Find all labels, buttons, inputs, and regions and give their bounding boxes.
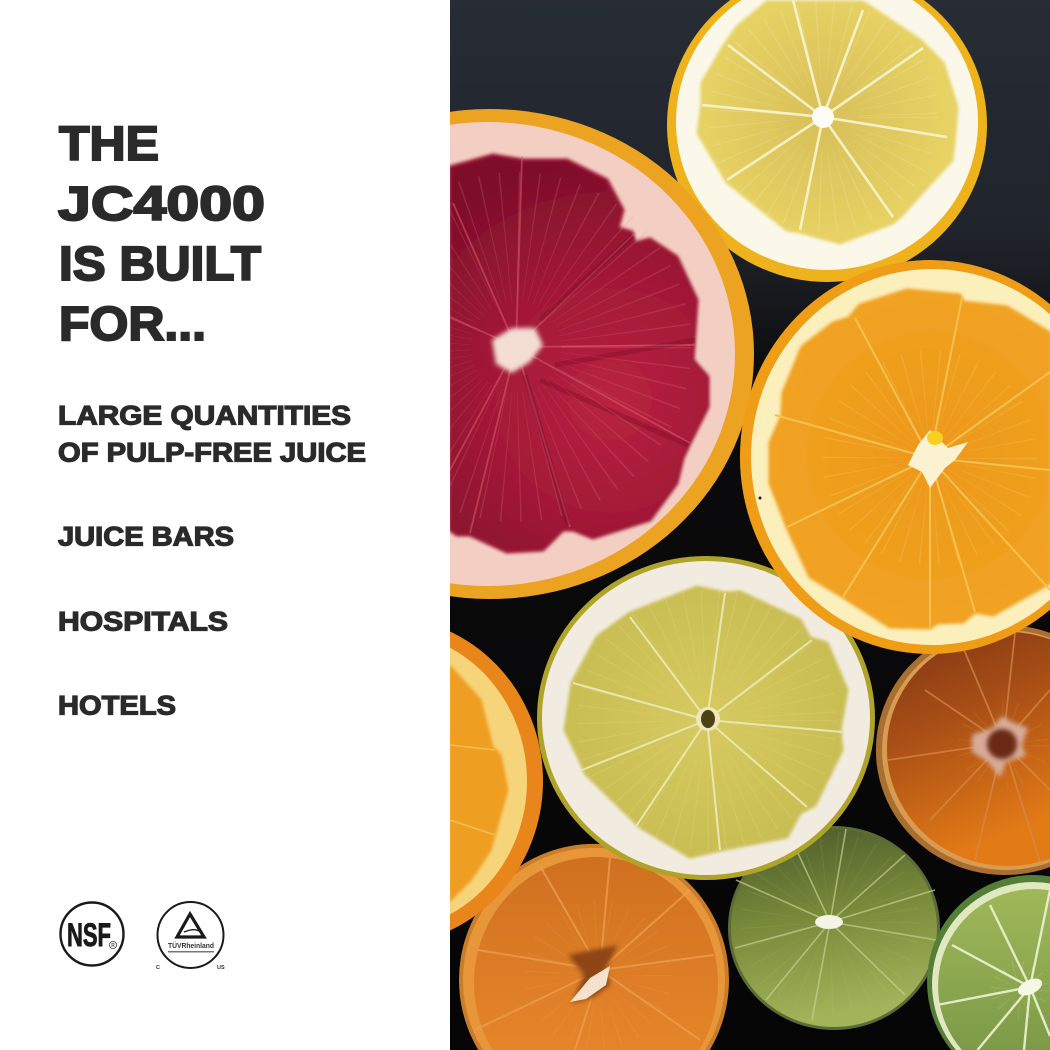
orange slice, large right — [740, 260, 1050, 654]
use case: hotels: HOTELS — [58, 690, 176, 720]
orange slice, left edge — [450, 632, 543, 930]
use case: large quantities of pulp-free juice: OF PULP-FREE JUICE — [58, 438, 366, 468]
grapefruit slice — [450, 109, 754, 599]
lime slice, centre bottom — [728, 826, 940, 1030]
icon: NSF certification: NSF — [67, 917, 111, 953]
icon: NSF certification — [60, 902, 124, 966]
title: IS BUILT — [59, 238, 261, 291]
use case: hospitals: HOSPITALS — [58, 606, 228, 636]
lemon slice, centre — [537, 556, 875, 880]
icon: NSF certification: R — [111, 943, 115, 949]
title: JC4000 — [58, 178, 265, 231]
dark slate backdrop — [450, 0, 1050, 1050]
use case: juice bars: JUICE BARS — [58, 522, 234, 552]
title: FOR... — [59, 298, 206, 351]
icon: TUV Rheinland certification — [156, 902, 225, 971]
dark orange slice, right — [876, 625, 1050, 875]
use case: large quantities of pulp-free juice — [58, 400, 366, 468]
icon: TUV Rheinland certification: US — [217, 965, 225, 971]
lemon slice, top — [667, 0, 987, 282]
icon: TUV Rheinland certification: C — [156, 965, 160, 971]
panel: citrus photo — [450, 0, 1050, 1050]
title — [58, 118, 265, 351]
lime slice, right edge — [927, 875, 1050, 1050]
use case: large quantities of pulp-free juice: LARGE QUANTITIES — [58, 400, 351, 430]
icon: TUV Rheinland certification: TÜVRheinland — [168, 941, 214, 950]
title: THE — [59, 118, 159, 171]
orange slice, bottom — [459, 844, 729, 1050]
